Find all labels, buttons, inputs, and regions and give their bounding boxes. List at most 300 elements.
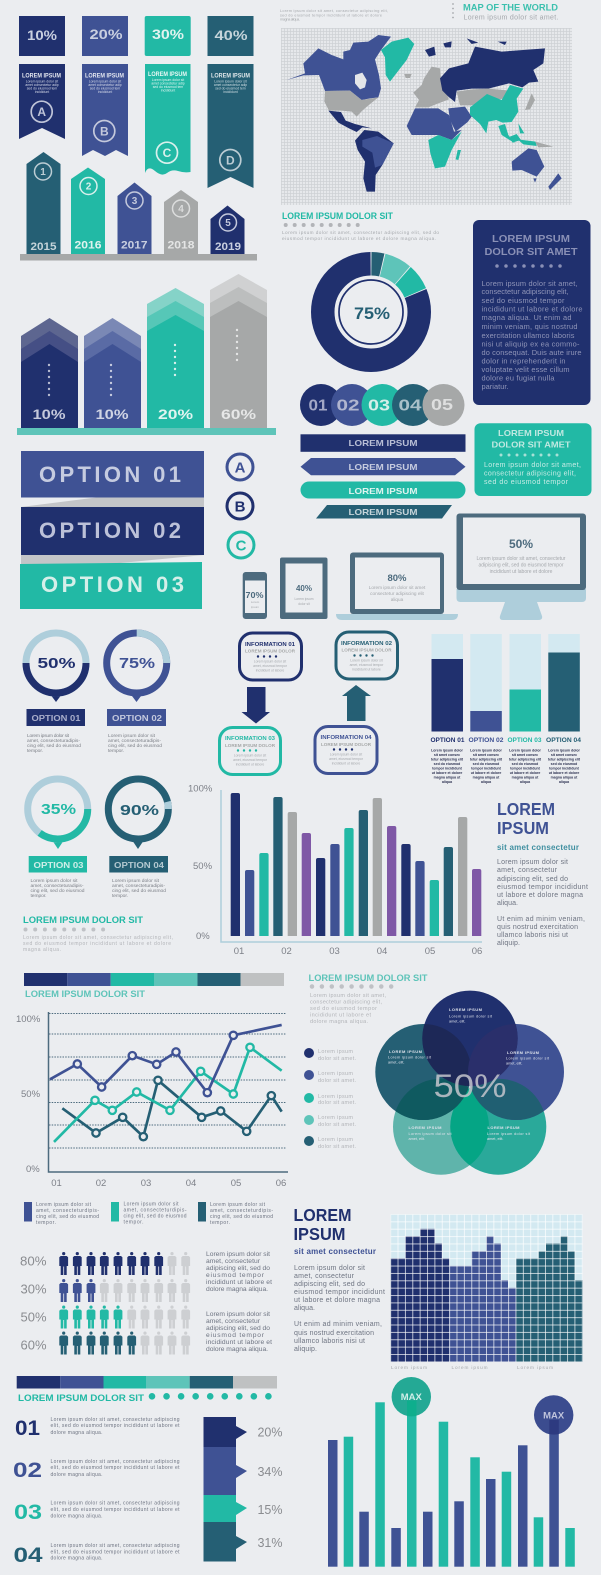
item 01 (15, 1417, 180, 1440)
line chart: 02 (96, 1178, 106, 1189)
stacked option bars: aliqua (520, 780, 530, 784)
percentage tiles: 20% (90, 26, 123, 42)
venn heading: LOREM IPSUM DOLOR SIT (308, 973, 428, 983)
venn diagram 50%: 50% (434, 1068, 506, 1104)
pixel skyline chart: Lorem ipsum (391, 1365, 427, 1370)
information box 02: INFORMATION 02 (341, 641, 392, 647)
gauge 75% option 02: tempor. (108, 748, 124, 754)
gauge 50% option 01: amet, consecteturadipis- (27, 738, 80, 744)
item 01: dolore magna aliqua. (50, 1430, 102, 1436)
ribbon D: amet consectetur adip (214, 83, 247, 87)
venn heading: sed do eiusmod tempor (310, 1006, 377, 1012)
text block beside pixel chart: ut labore et dolore magna (294, 1297, 380, 1304)
north africa (407, 108, 462, 140)
device: desktop monitor: 50% (509, 537, 533, 551)
bar 10% blue (84, 318, 141, 428)
gauge 50% option 01 (26, 633, 86, 754)
panel: navy text card: magna aliqua. Ut enim ad (482, 313, 572, 322)
column chart: 06 (472, 946, 482, 957)
ribbon A (19, 64, 65, 139)
legend row: cing elit, sed do eiusmod (124, 1214, 187, 1220)
ribbon A: LOREM IPSUM (22, 72, 61, 80)
option 01 banner: OPTION 01 (39, 462, 181, 487)
stacked option bars: sit amet consec (434, 753, 460, 757)
text block beside pixel chart: Lorem ipsum dolor sit (294, 1265, 365, 1272)
device: phone: 70% (246, 591, 264, 600)
people text: incididunt ut labore et (206, 1279, 272, 1286)
venn diagram 50% (375, 991, 564, 1175)
gauge section heading (23, 915, 173, 953)
year arrows timeline: 2015 (30, 241, 56, 253)
line chart: 06 (276, 1178, 286, 1189)
stacked option bars: Lorem ipsum dolor (431, 748, 463, 752)
stacked option bars: Lorem ipsum dolor (470, 748, 502, 752)
item 02: Lorem ipsum dolor sit amet, consectetur adipiscing (50, 1459, 180, 1465)
venn heading: incididunt ut labore et (310, 1012, 371, 1018)
letter circles (227, 454, 254, 558)
text block beside column chart: quis nostrud exercitation (497, 924, 578, 931)
device: tablet (280, 558, 328, 619)
panel: navy text card: dolore eu fugiat nulla (482, 374, 555, 382)
year arrows timeline: 2017 (121, 240, 148, 252)
text block beside column chart (497, 799, 588, 947)
people text: amet, consectetur (206, 1318, 261, 1325)
year arrows timeline: 2 (86, 182, 92, 192)
text block beside column chart: aliquip. (497, 940, 520, 947)
legend row: tempor. (210, 1220, 230, 1226)
information box 04: incididunt ut labore (332, 762, 360, 766)
year arrows timeline: 2018 (168, 240, 194, 252)
gauge 35% option 03: Lorem ipsum dolor sit (30, 878, 78, 884)
year arrows timeline: 1 (40, 167, 46, 178)
stacked option bars: sed do eiusmod (551, 762, 577, 766)
bar 10% navy (21, 318, 78, 428)
middle east (448, 107, 472, 132)
information box 02: amet, eiusmod tempor (350, 663, 384, 667)
ribbon D (208, 64, 254, 188)
column chart: 02 (281, 946, 292, 957)
line chart: 04 (186, 1178, 196, 1189)
information box 03: Lorem ipsum dolor sit (234, 754, 266, 758)
panel: navy text card: sed do eiusmod tempor (482, 296, 565, 305)
stacked share bar (204, 1417, 282, 1562)
usa (324, 91, 378, 117)
max marker blue: MAX (543, 1410, 564, 1420)
gauge 35% option 03: OPTION 03 (34, 861, 84, 870)
item 01: elit, sed do eiusmod tempor incididunt ut labore et (50, 1423, 180, 1429)
item 04 (14, 1543, 180, 1567)
information box 01: amet, eiusmod tempor (253, 664, 288, 668)
donut heading (282, 211, 439, 241)
information box 02: Lorem ipsum dolor sit (350, 658, 383, 662)
item 04: dolore magna aliqua. (50, 1556, 102, 1562)
information box 03 (220, 728, 280, 774)
numbered circles: 03 (368, 398, 390, 414)
stacked option bars: ut labore et dolore (432, 771, 462, 775)
map heading: MAP OF THE WORLD (463, 2, 558, 14)
stacked share bar: 20% (257, 1426, 282, 1440)
line chart: 100% (16, 1014, 41, 1025)
chevron bars (17, 274, 276, 435)
bar 20% teal: 20% (158, 407, 193, 422)
gauge 75% option 02: OPTION 02 (112, 714, 163, 723)
information box 02: incididunt ut labore (352, 668, 381, 672)
stacked option bars: magna aliqua ut (434, 776, 461, 780)
gauge section heading: magna aliqua. (23, 947, 61, 953)
people text (206, 1251, 272, 1353)
legend row: Lorem ipsum dolor sit (124, 1202, 179, 1208)
panel: teal text card: Lorem ipsum dolor sit amet, (484, 462, 581, 469)
panel: teal text card: consectetur adipiscing elit, (484, 470, 576, 478)
gauge 75% option 02: Lorem ipsum dolor sit (108, 733, 156, 739)
ribbon B (82, 64, 128, 156)
small intro text above map: magna aliqua. (280, 18, 300, 22)
small intro text above map: Lorem ipsum dolor sit amet, consectetur adipiscing elit, (280, 9, 388, 13)
ribbon D: LOREM IPSUM (211, 72, 250, 80)
venn heading: Lorem ipsum dolor sit amet, (310, 993, 386, 999)
venn diagram 50%: LOREM IPSUM (507, 1050, 540, 1055)
venn diagram 50%: LOREM IPSUM (488, 1125, 520, 1130)
max marker blue (534, 1395, 573, 1435)
labelled banner shapes: LOREM IPSUM (348, 486, 418, 496)
percentage tiles: 30% (152, 26, 185, 42)
stacked option bars: tetur adipiscing elit (548, 758, 581, 762)
panel: teal text card: DOLOR SIT AMET (492, 440, 571, 450)
map heading (453, 2, 559, 22)
text block beside pixel chart: eiusmod tempor incididunt (294, 1289, 385, 1296)
venn legend: dolor sit amet. (318, 1144, 356, 1150)
legend row: amet, consecteturdipis- (210, 1208, 273, 1214)
teal series (54, 1044, 282, 1142)
column chart (188, 784, 482, 957)
text block beside pixel chart (294, 1205, 385, 1353)
device: laptop: 80% (387, 573, 407, 584)
south east asia (498, 123, 537, 146)
ribbon C: Lorem ipsum dolor sit (152, 78, 184, 82)
stacked option bars: tetur adipiscing elit (431, 758, 464, 762)
device: desktop monitor (456, 514, 586, 620)
numbered circles: 02 (336, 398, 360, 414)
text block beside column chart: eiusmod tempor incididunt (497, 884, 588, 891)
stacked option bars: sed do eiusmod (512, 762, 538, 766)
letter circles: A (235, 460, 246, 476)
gauge 90% option 04: cing elit, sed do eiusmod (112, 888, 166, 894)
panel: teal text card: LOREM IPSUM (498, 428, 564, 438)
stacked option bars: tempor incididunt (432, 766, 463, 770)
venn legend: Lorem ipsum (318, 1071, 353, 1077)
device: tablet: dolor sit (298, 602, 310, 606)
gauge 90% option 04: OPTION 04 (114, 861, 165, 870)
canada and alaska (287, 35, 391, 100)
stacked option bars: OPTION 03 (508, 737, 542, 744)
ribbon C (145, 64, 190, 175)
venn legend: dolor sit amet. (318, 1100, 356, 1106)
venn diagram 50%: Lorem ipsum dolor sit (449, 1014, 493, 1018)
labelled banner shapes (300, 434, 466, 518)
stacked option bars: sit amet consec (551, 753, 577, 757)
bottom heading with dots: LOREM IPSUM DOLOR SIT (18, 1393, 145, 1403)
stacked option bars: tetur adipiscing elit (470, 758, 503, 762)
legend row: tempor. (36, 1220, 56, 1226)
venn heading (308, 973, 428, 1025)
information box 03: incididunt ut labore (236, 762, 264, 766)
information box 02: LOREM IPSUM DOLOR (342, 648, 392, 654)
max marker teal (392, 1377, 431, 1416)
gauge section heading: sed do eiusmod tempor incididunt ut labore et dolore (23, 941, 171, 947)
people pictogram: 30% (20, 1282, 47, 1296)
gauge 90% option 04 (108, 779, 168, 899)
labelled banner shapes: LOREM IPSUM (348, 507, 418, 517)
pixel skyline chart: Lorem ipsum (452, 1365, 488, 1370)
people text: Lorem ipsum dolor sit (206, 1311, 270, 1318)
colour strip bottom (17, 1376, 277, 1388)
venn legend: dolor sit amet. (318, 1056, 356, 1062)
gauge 75% option 02: 75% (119, 655, 155, 672)
item 03: 03 (14, 1501, 42, 1524)
legend row: tempor. (124, 1220, 144, 1226)
text block beside column chart: IPSUM (497, 818, 549, 838)
text block beside pixel chart: ullamco laboris nisi ut (294, 1338, 365, 1345)
year arrows timeline: 4 (178, 204, 184, 215)
panel: navy text card: exercitation ullamco laboris (482, 331, 575, 340)
legend row: amet, consecteturdipis- (124, 1208, 187, 1214)
southern africa (428, 132, 462, 168)
panel: navy text card: DOLOR SIT AMET (484, 246, 578, 258)
ribbon A: Lorem ipsum dolor sit (26, 80, 58, 84)
ribbon B: B (100, 124, 109, 138)
text block beside pixel chart: adipiscing elit, sed do (294, 1281, 365, 1288)
information box 03: INFORMATION 03 (225, 736, 275, 742)
information box 01: Lorem ipsum dolor sit (254, 660, 286, 664)
donut chart 75%: 75% (354, 304, 390, 323)
text block beside pixel chart: LOREM (294, 1205, 352, 1225)
legend row: Lorem ipsum dolor sit (36, 1202, 92, 1208)
text block beside pixel chart: aliquip. (294, 1346, 317, 1353)
dark teal series (62, 1077, 282, 1140)
panel: navy text card: Lorem ipsum dolor sit amet, (482, 279, 578, 288)
venn diagram 50%: amet, elit. (388, 1060, 404, 1064)
item 03: elit, sed do eiusmod tempor incididunt ut labore et (50, 1507, 180, 1513)
people pictogram: 60% (20, 1338, 47, 1352)
information box 01: LOREM IPSUM DOLOR (245, 648, 296, 654)
option 03 banner (20, 562, 202, 609)
option 03 banner: OPTION 03 (41, 572, 184, 597)
column chart: 100% (188, 784, 213, 794)
device: laptop: Lorem ipsum dolor sit amet (369, 585, 426, 590)
venn legend: dolor sit amet. (318, 1078, 356, 1084)
item 01: Lorem ipsum dolor sit amet, consectetur adipiscing (50, 1417, 180, 1423)
ribbon A: sed do eiusmod tem (27, 86, 57, 90)
ribbon A: incididunt (35, 90, 49, 94)
text block beside column chart: ullamco laboris nisi ut (497, 932, 568, 939)
panel: navy text card: dolor in reprehenderit in (482, 356, 566, 366)
gauge 50% option 01: tempor. (27, 748, 43, 754)
people pictogram: 80% (20, 1254, 47, 1268)
mexico and central america (328, 111, 372, 132)
information box 03: amet, eiusmod tempor (233, 758, 268, 762)
venn diagram 50%: amet, elit. (487, 1137, 503, 1141)
item 03 (14, 1500, 180, 1524)
gauge 90% option 04: Lorem ipsum dolor sit (112, 878, 160, 884)
legend row: cing elit, sed do eiusmod (36, 1214, 99, 1220)
stacked option bars: aliqua (442, 780, 452, 784)
people text: eiusmod tempor (206, 1332, 265, 1339)
device: tablet: 40% (296, 584, 312, 593)
stacked share bar: 31% (257, 1536, 282, 1550)
venn diagram 50%: amet, elit. (408, 1137, 425, 1141)
text block beside pixel chart: quis nostrud exercitation (294, 1330, 374, 1337)
venn diagram 50%: LOREM IPSUM (449, 1007, 483, 1012)
world map (281, 28, 572, 205)
russia (440, 47, 545, 102)
arrow: down (242, 687, 270, 724)
legend row: cing elit, sed do eiusmod (210, 1214, 273, 1220)
line chart: 0% (26, 1164, 40, 1175)
panel: teal text card: sed do eiusmod tempor (484, 479, 569, 486)
panel: navy text card: nisi ut aliquip ex ea commo- (482, 340, 580, 348)
gauge 35% option 03 (28, 779, 88, 899)
bar 60% grey: 60% (221, 407, 256, 422)
item 02: elit, sed do eiusmod tempor incididunt ut labore et (50, 1465, 180, 1471)
gauge section heading: Lorem ipsum dolor sit amet, consectetur adipiscing elit, (23, 935, 173, 941)
option 02 banner: OPTION 02 (39, 518, 181, 543)
ribbon D: incididunt (223, 90, 238, 94)
venn diagram 50%: LOREM IPSUM (389, 1049, 423, 1054)
numbered circles: 01 (308, 398, 328, 414)
option banners (20, 451, 204, 609)
people text: amet, consectetur (206, 1258, 261, 1265)
max marker teal: MAX (401, 1392, 422, 1402)
information box 03: LOREM IPSUM DOLOR (225, 743, 276, 749)
australia and new zealand (512, 148, 544, 183)
ribbon D: Lorem ipsum dolor sit (214, 80, 247, 84)
arrow: up (342, 685, 371, 721)
bar 60% grey (210, 274, 267, 428)
gauge 35% option 03: 35% (41, 801, 76, 818)
ribbon B: Lorem ipsum dolor sit (89, 80, 121, 84)
venn legend (304, 1048, 356, 1150)
row 80% (59, 1252, 190, 1275)
bar 10% navy: 10% (32, 407, 66, 422)
text block beside pixel chart: sit amet consectetur (294, 1247, 376, 1256)
venn legend: Lorem ipsum (318, 1049, 353, 1055)
panel: navy text card: do consequat. Duis aute irure (482, 348, 582, 357)
ribbon A: A (37, 105, 46, 119)
ribbon B: amet consectetur adip (88, 83, 122, 87)
column chart: 50% (193, 861, 213, 872)
max bar chart (328, 1377, 575, 1567)
donut heading: Lorem ipsum dolor sit amet, consectetur adipiscing elit, sed do (282, 230, 439, 235)
text block beside column chart: Lorem ipsum dolor sit (497, 859, 568, 866)
device: desktop monitor: adipiscing elit, sed do eiusmod tempor (478, 562, 564, 568)
ribbon C: C (163, 146, 172, 160)
text block beside column chart: ut labore et dolore magna (497, 892, 583, 899)
people pictogram: 50% (20, 1310, 47, 1324)
column chart: 03 (329, 946, 340, 957)
percentage tiles: 10% (27, 27, 58, 43)
year arrows timeline: 2019 (215, 241, 241, 253)
venn legend: Lorem ipsum (318, 1115, 353, 1121)
people text: dolore magna aliqua. (206, 1346, 268, 1353)
information box 01: incididunt ut labore (256, 668, 284, 672)
south america (355, 130, 394, 192)
item 02 (13, 1459, 180, 1482)
text block beside column chart: LOREM (497, 799, 555, 819)
ribbon B: incididunt (98, 90, 112, 94)
venn diagram 50%: Lorem ipsum dolor sit (388, 1056, 432, 1060)
year arrows timeline (20, 152, 257, 260)
text block beside column chart: aliqua. (497, 900, 518, 907)
stacked option bars: magna aliqua ut (551, 776, 578, 780)
stacked option bars: sed do eiusmod (473, 762, 499, 766)
ribbon C: LOREM IPSUM (148, 71, 187, 78)
gauge 90% option 04: amet, consecteturadipis- (112, 883, 165, 889)
device: phone: ipsum (251, 605, 259, 609)
stacked option bars: ut labore et dolore (471, 771, 501, 775)
bar 20% teal (147, 288, 204, 428)
panel: navy text card: voluptate velit esse cillum (482, 365, 570, 374)
year arrows timeline: 5 (225, 218, 231, 229)
colour strip top: LOREM IPSUM DOLOR SIT (25, 989, 146, 999)
stacked option bars: OPTION 02 (468, 737, 504, 744)
option 01 banner (21, 451, 204, 498)
ribbon C: amet consectetur adip (151, 82, 185, 86)
stacked option bars (430, 634, 581, 784)
row 50% (59, 1306, 190, 1328)
line chart: 05 (231, 1178, 241, 1189)
people text: adipiscing elit, sed do (206, 1325, 270, 1332)
text block beside pixel chart: aliqua. (294, 1305, 315, 1312)
information box 04: LOREM IPSUM DOLOR (321, 742, 372, 748)
map heading: Lorem ipsum dolor sit amet. (464, 14, 559, 22)
column chart: 01 (234, 946, 244, 957)
information box 04: Lorem ipsum dolor sit (330, 752, 362, 756)
gauge 50% option 01: OPTION 01 (32, 714, 81, 723)
venn heading: consectetur adipiscing elit, (310, 1000, 382, 1006)
column chart: 05 (425, 946, 435, 957)
venn diagram 50%: LOREM IPSUM (408, 1125, 442, 1130)
device: phone: Lorem (251, 600, 260, 604)
line chart: 03 (141, 1178, 151, 1189)
device: laptop (336, 552, 458, 620)
stacked option bars: tempor incididunt (549, 766, 580, 770)
stacked option bars: aliqua (481, 780, 491, 784)
stacked option bars: tempor incididunt (510, 766, 541, 770)
people text: incididunt ut labore et (206, 1339, 272, 1346)
venn legend: Lorem ipsum (318, 1137, 353, 1143)
hudson bay (355, 73, 367, 89)
item 04: 04 (14, 1544, 43, 1567)
numbered circles: 04 (398, 398, 422, 414)
gauge 75% option 02: cing elit, sed do eiusmod (108, 743, 162, 749)
panel: teal text card (474, 423, 592, 496)
ribbon B: LOREM IPSUM (85, 72, 124, 80)
ribbon B: sed do eiusmod tem (90, 86, 120, 90)
venn legend: dolor sit amet. (318, 1122, 356, 1128)
stacked option bars: magna aliqua ut (512, 776, 539, 780)
item 01: 01 (15, 1417, 40, 1440)
numbered circles: 05 (431, 397, 453, 414)
china and india (470, 85, 523, 133)
people text: Lorem ipsum dolor sit (206, 1251, 270, 1258)
venn heading: dolore magna aliqua. (310, 1019, 368, 1025)
stacked option bars: ut labore et dolore (549, 771, 579, 775)
information box 04: INFORMATION 04 (320, 735, 372, 741)
gauge 50% option 01: cing elit, sed do eiusmod (27, 743, 81, 749)
ribbon C: sed do eiusmod tem (153, 85, 183, 89)
legend row: Lorem ipsum dolor sit (210, 1202, 266, 1208)
ribbon A: amet consectetur adip (25, 83, 59, 87)
